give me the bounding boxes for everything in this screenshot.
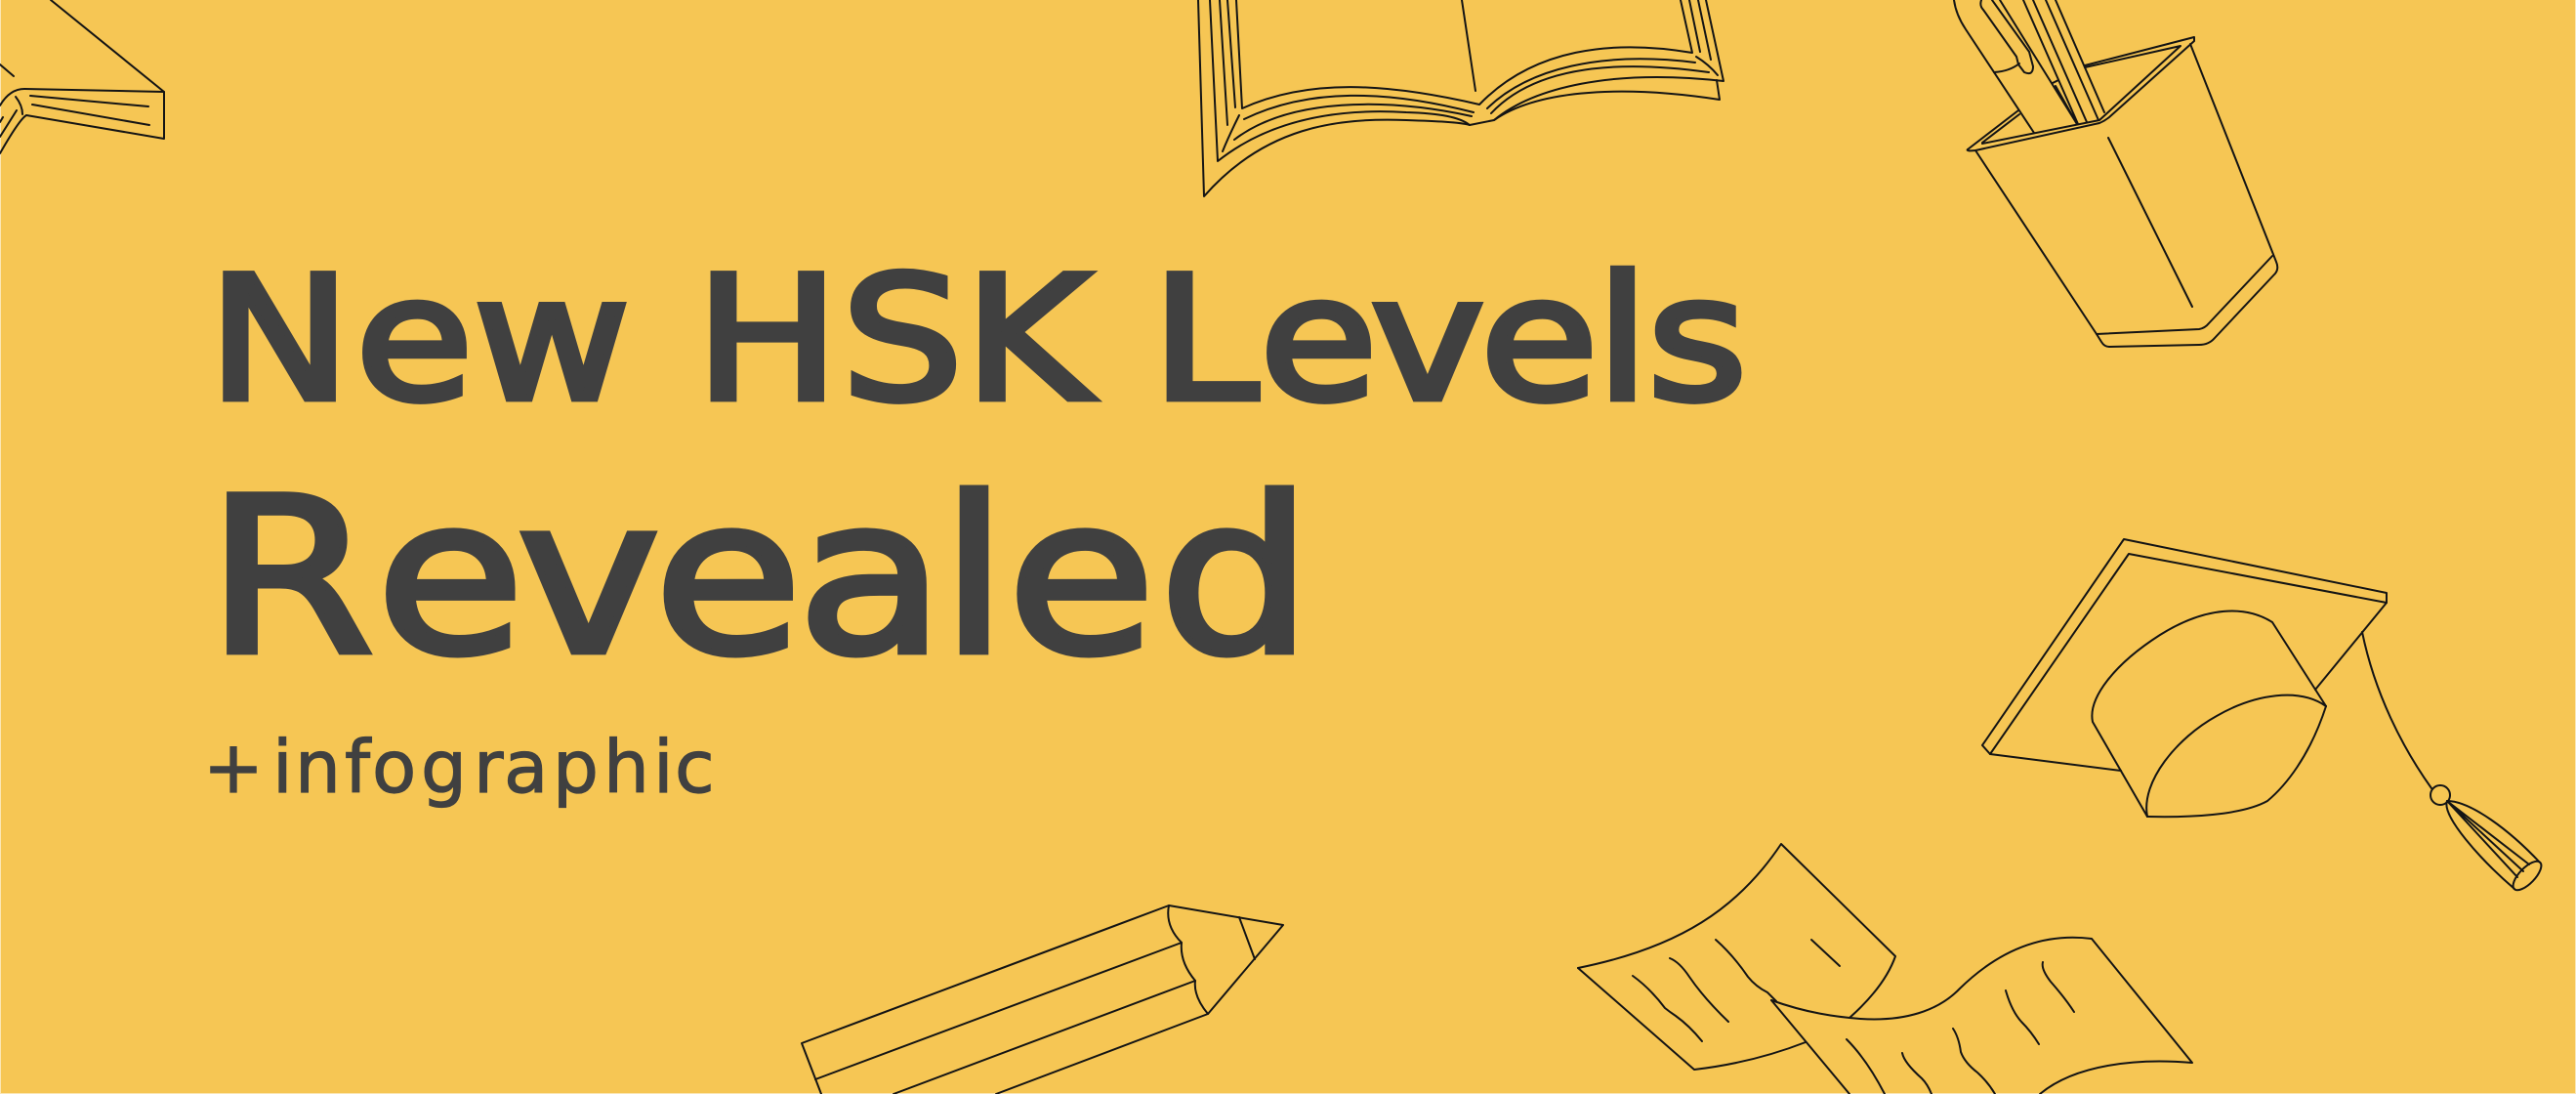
icon: graduation cap <box>1982 539 2546 895</box>
title: Revealed: Revealed <box>207 453 1312 703</box>
pens in the cup <box>1954 0 2104 133</box>
icon: curled sheets of paper <box>1578 844 2192 1094</box>
icon: closed book corner top left <box>0 0 164 153</box>
icon: open book <box>1198 0 1724 196</box>
icon: pencil <box>802 905 1283 1094</box>
icon: pen holder cup <box>1954 0 2277 347</box>
subtitle: + infographic: + infographic <box>203 726 715 810</box>
tassel <box>2362 632 2546 895</box>
title: New HSK Levels: New HSK Levels <box>208 240 1747 439</box>
